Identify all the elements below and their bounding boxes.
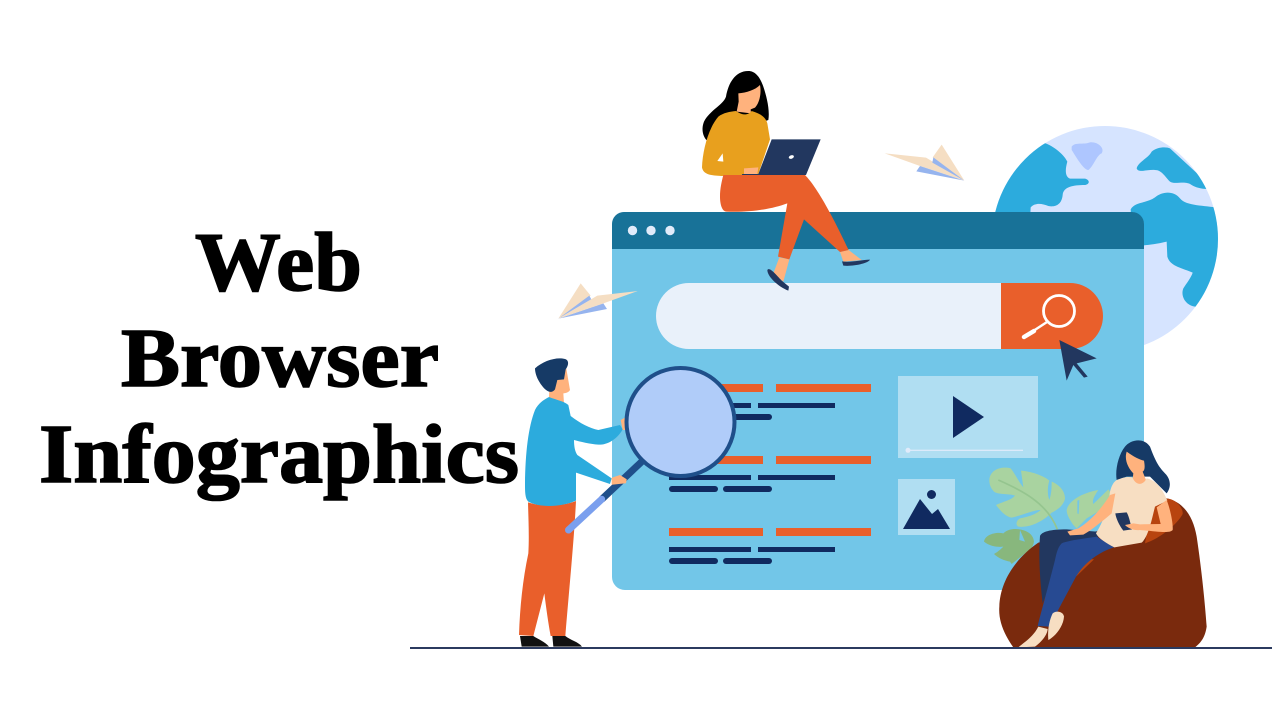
ground line <box>410 647 1272 649</box>
icon: cursor arrow <box>1059 340 1097 381</box>
person: woman with laptop <box>702 71 870 291</box>
title: Web <box>195 216 362 309</box>
title: Browser <box>121 312 439 405</box>
title <box>39 216 519 501</box>
icon: paper plane left <box>558 283 638 319</box>
result list <box>669 384 871 564</box>
icon: globe <box>980 126 1220 352</box>
panel: browser window <box>612 212 1144 590</box>
person: woman on bean bag <box>999 440 1207 647</box>
search bar <box>656 283 1103 349</box>
image thumbnail <box>898 479 955 535</box>
person: man <box>519 358 626 647</box>
icon: big magnifying glass <box>568 368 734 530</box>
icon: paper plane right <box>885 145 964 181</box>
plant leaves <box>984 468 1113 564</box>
video player <box>898 376 1038 458</box>
title: Infographics <box>39 408 519 501</box>
